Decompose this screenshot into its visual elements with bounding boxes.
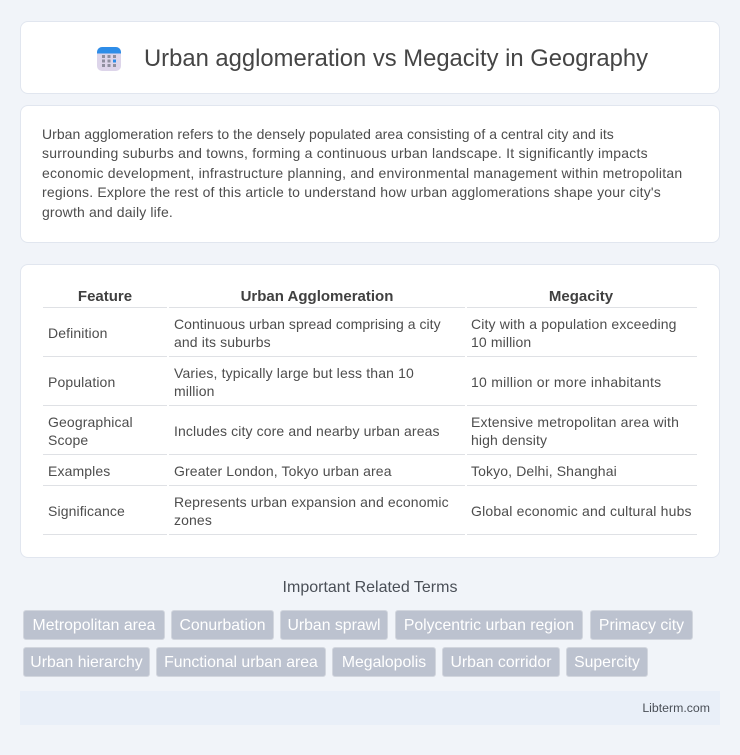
- row: definition: Continuous urban spread comprising a city: [174, 316, 441, 332]
- text: intro: surrounding suburbs and towns, forming a continuous urban landscape. It significantly impacts: [42, 145, 648, 161]
- related term tags: Metropolitan area: [33, 617, 155, 634]
- panel: comparison table: [20, 264, 720, 558]
- row: significance: zones: [174, 512, 212, 528]
- footer bar: [20, 691, 720, 725]
- text: intro: growth and daily life.: [42, 204, 173, 220]
- row: significance: Global economic and cultural hubs: [471, 503, 692, 519]
- related term tags: Supercity: [574, 654, 640, 671]
- row: examples: Examples: [48, 463, 110, 479]
- text: intro: [42, 126, 682, 220]
- related term tags: Urban corridor: [451, 654, 551, 671]
- panel: intro paragraph: [20, 105, 720, 243]
- related term tags: Polycentric urban region: [404, 617, 574, 634]
- row: definition: City with a population exceeding: [471, 316, 677, 332]
- row: definition: 10 million: [471, 334, 531, 350]
- footer source: Libterm.com: [642, 701, 710, 715]
- row: population: Varies, typically large but less than 10: [174, 365, 414, 381]
- icon: calendar: [97, 47, 121, 71]
- row: significance: [48, 494, 692, 528]
- row: geographical scope: high density: [471, 432, 547, 448]
- row: geographical scope: [48, 414, 679, 448]
- panel: title header: [20, 21, 720, 94]
- related term tags: Urban sprawl: [287, 617, 381, 634]
- related term tags: Functional urban area: [164, 654, 318, 671]
- row: population: 10 million or more inhabitants: [471, 374, 661, 390]
- title: Urban agglomeration vs Megacity in Geography: [144, 45, 648, 72]
- row: geographical scope: Includes city core and nearby urban areas: [174, 423, 440, 439]
- related term tags: Urban hierarchy: [30, 654, 143, 671]
- row: examples: [48, 463, 617, 479]
- row: definition: and its suburbs: [174, 334, 271, 350]
- text: intro: economic development, infrastructure planning, and environmental management within metropolitan: [42, 164, 682, 180]
- text: intro: Urban agglomeration refers to the densely populated area consisting of a central city and its: [42, 126, 614, 142]
- row: examples: Greater London, Tokyo urban area: [174, 463, 392, 479]
- related term tags: Conurbation: [179, 617, 266, 634]
- row: population: [48, 365, 661, 399]
- row: significance: Represents urban expansion and economic: [174, 494, 449, 510]
- row: geographical scope: Scope: [48, 432, 88, 448]
- table header: Urban Agglomeration: [241, 288, 393, 305]
- text: intro: regions. Explore the rest of this article to understand how urban agglomerations shape your city's: [42, 184, 661, 200]
- row: geographical scope: Extensive metropolitan area with: [471, 414, 679, 430]
- table header: [78, 288, 613, 305]
- row: examples: Tokyo, Delhi, Shanghai: [471, 463, 617, 479]
- heading: related terms: Important Related Terms: [283, 579, 457, 596]
- row: definition: [48, 316, 677, 350]
- row: geographical scope: Geographical: [48, 414, 133, 430]
- row: population: Population: [48, 374, 115, 390]
- related term tags: [23, 610, 693, 677]
- row: significance: Significance: [48, 503, 125, 519]
- row: definition: Definition: [48, 325, 108, 341]
- table header: Feature: [78, 288, 132, 305]
- related term tags: Megalopolis: [342, 654, 426, 671]
- related term tags: Primacy city: [599, 617, 684, 634]
- row: population: million: [174, 383, 215, 399]
- table header: Megacity: [549, 288, 613, 305]
